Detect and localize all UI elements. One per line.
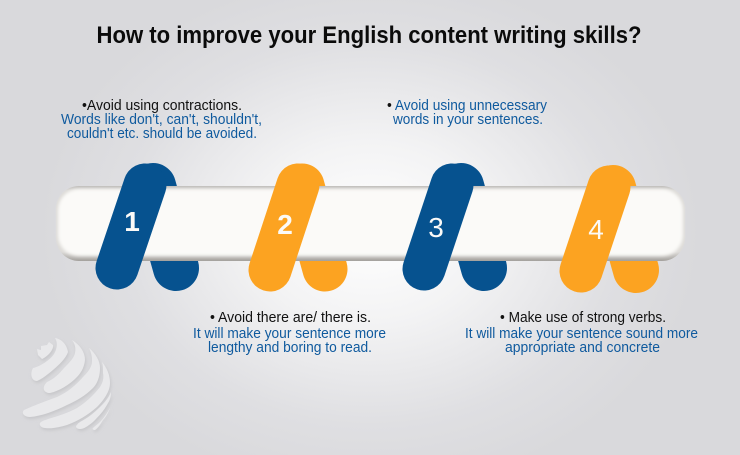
tip 3 text: • Avoid using unnecessary [387, 98, 548, 114]
tip 4 text: • Make use of strong verbs. [500, 310, 666, 326]
tip 1 text: Words like don't, can't, shouldn't, [61, 112, 262, 128]
title: How to improve your English content writing skills? [96, 22, 642, 49]
tip 4 text: appropriate and concrete [505, 340, 660, 356]
tip 1 text [61, 98, 262, 142]
tip 1 text: couldn't etc. should be avoided. [67, 126, 257, 142]
ribbon back strands [153, 186, 636, 270]
ribbon 4 front with number: 4 [588, 214, 604, 245]
tip 2 text: It will make your sentence more [193, 326, 386, 342]
ribbon 2 front with number: 2 [277, 209, 293, 240]
ribbon 1 front with number: 1 [124, 206, 140, 237]
icon: striped globe logo [23, 338, 111, 430]
tip 2 text [193, 310, 386, 356]
tip 4 text: It will make your sentence sound more [465, 326, 698, 342]
tip 3 text [387, 98, 548, 128]
tip 1 text: •Avoid using contractions. [82, 98, 242, 114]
ribbon 3 front with number [424, 185, 452, 269]
tip 4 text [465, 310, 698, 356]
ribbon 1 front with number [117, 185, 145, 268]
ribbon 4 front with number [581, 187, 609, 271]
ribbon 3 front with number: 3 [428, 212, 444, 243]
tip 2 text: • Avoid there are/ there is. [210, 310, 371, 326]
tip 3 text: words in your sentences. [392, 112, 543, 128]
tip 2 text: lengthy and boring to read. [208, 340, 372, 356]
ribbon 2 front with number [270, 185, 298, 270]
central bar [56, 186, 685, 261]
